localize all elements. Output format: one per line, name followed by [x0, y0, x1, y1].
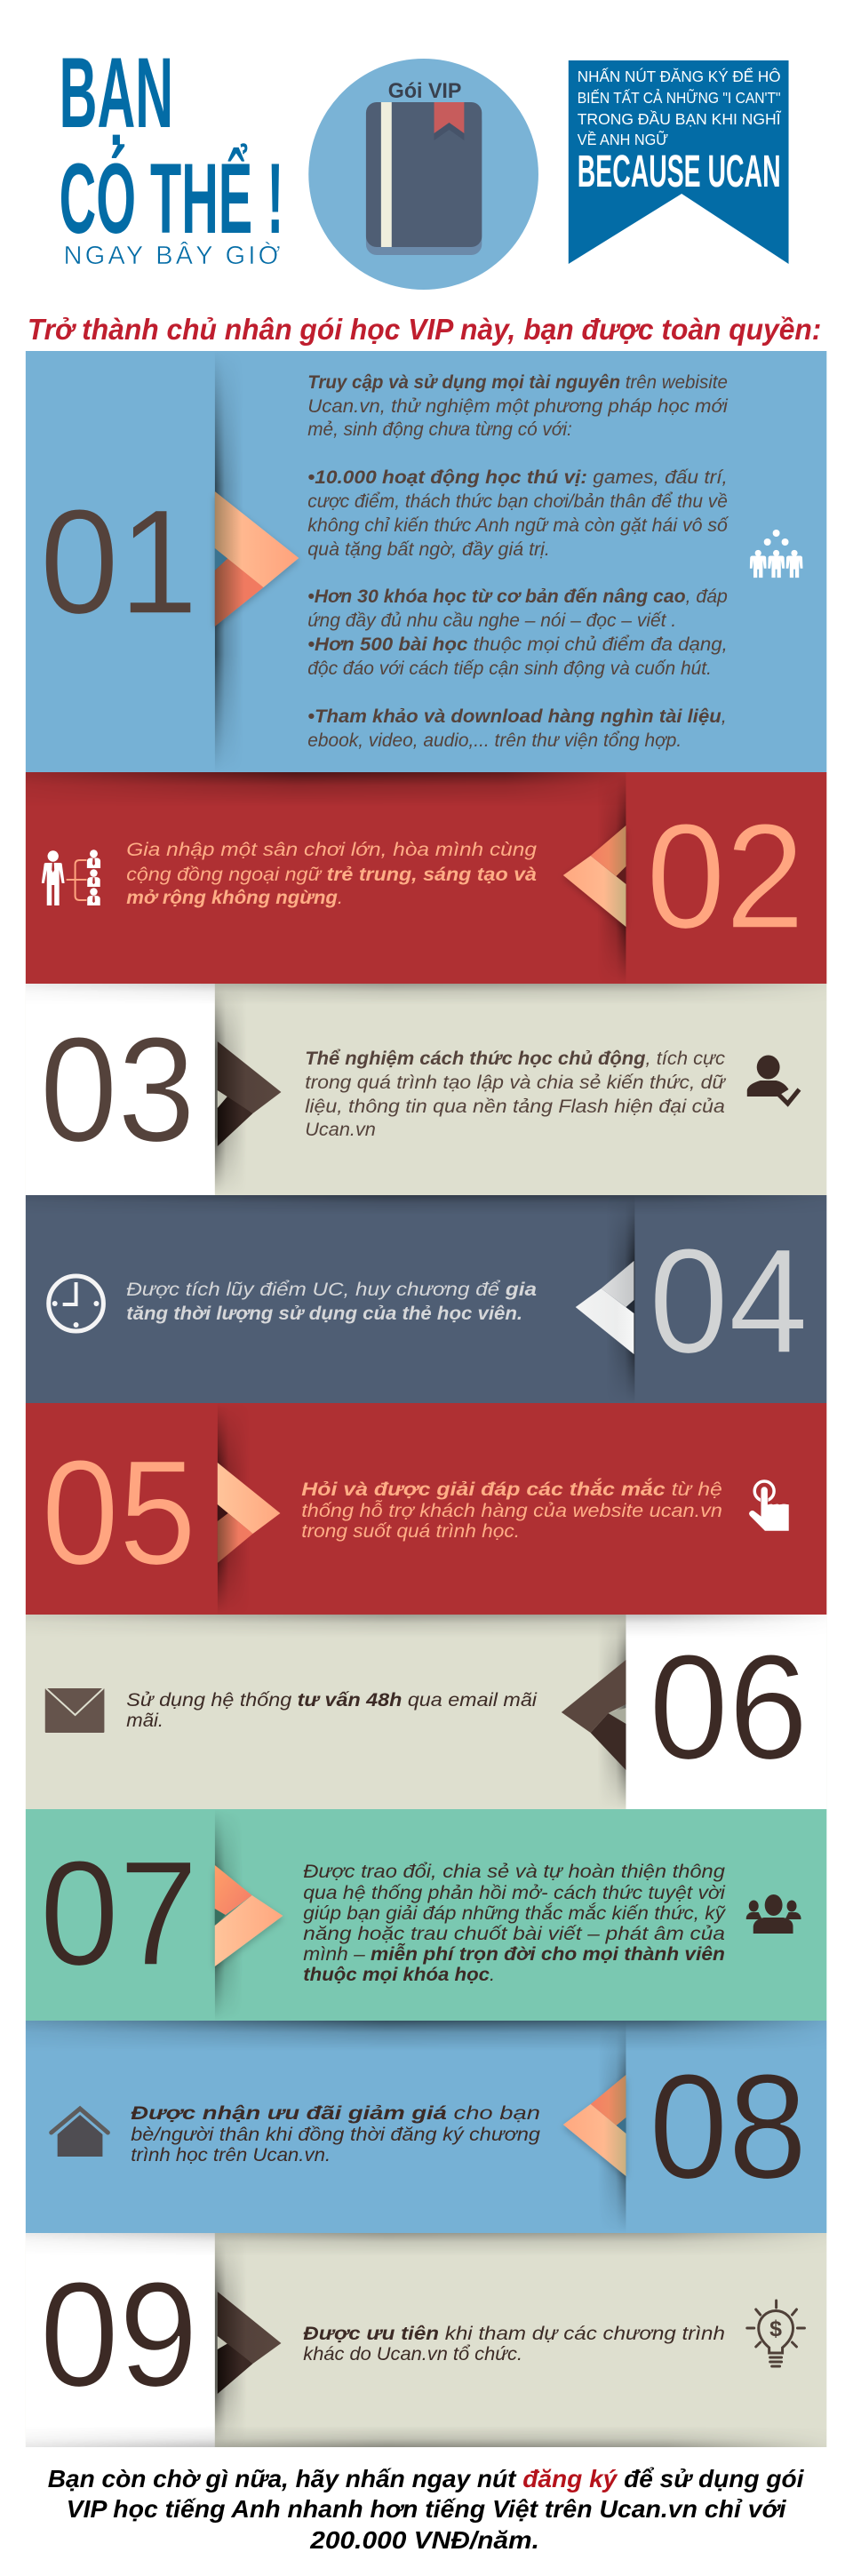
closing call to action: 200.000 VNĐ/năm.: [309, 2526, 539, 2554]
text 03: trong quá trình tạo lập và chia sẻ kiến thức, dữ: [305, 1073, 727, 1093]
text 04: [126, 1280, 537, 1324]
number 01: 01: [40, 478, 198, 645]
icon: pointing hand: [749, 1481, 789, 1531]
text 07: [303, 1862, 727, 1985]
text 03: Thể nghiệm cách thức học chủ động , tích cực: [305, 1049, 725, 1069]
arrow 02: [563, 825, 626, 927]
text 05: trong suốt quá trình học.: [301, 1521, 520, 1542]
text 01: cược điểm, thách thức bạn chơi/bản thân để thu về: [307, 490, 728, 512]
heading line: BẠN: BẠN: [60, 37, 173, 148]
banner text: TRONG ĐẦU BẠN KHI NGHĨ: [578, 109, 782, 128]
arrow 07: [215, 1865, 283, 1966]
number 07: 07: [40, 1830, 198, 1997]
text 01: quà tặng bất ngờ, đầy giá trị.: [307, 538, 550, 560]
text 07: mình – miễn phí trọn đời cho mọi thành viên: [303, 1944, 725, 1965]
panel 07: [26, 1809, 826, 2021]
closing call to action: [48, 2465, 805, 2554]
text 04: Được tích lũy điểm UC, huy chương để gia: [126, 1280, 537, 1300]
subheading: NGAY BÂY GIỜ: NGAY BÂY GIỜ: [64, 241, 281, 270]
text 01: •10.000 hoạt động học thú vị: games, đấu trí,: [307, 467, 728, 488]
banner text: BIẾN TẤT CẢ NHỮNG "I CAN'T": [578, 88, 781, 107]
text 08: trình học trên Ucan.vn.: [131, 2145, 331, 2165]
panel 05: [26, 1403, 826, 1615]
arrow 08: [563, 2075, 626, 2176]
text 01: •Hơn 500 bài học thuộc mọi chủ điểm đa dạng,: [307, 634, 728, 655]
arrow 03: [218, 1041, 281, 1146]
text 02: [126, 840, 537, 908]
text 01: ứng đầy đủ nhu cầu nghe – nói – đọc – viết .: [307, 610, 676, 631]
text 08: Được nhận ưu đãi giảm giá cho bạn: [131, 2103, 540, 2124]
panel 06: [26, 1615, 826, 1809]
text 06: mãi.: [126, 1711, 163, 1731]
text 01: không chỉ kiến thức Anh ngữ mà còn gặt hái vô số: [307, 514, 729, 536]
text 02: cộng đồng ngoại ngữ trẻ trung, sáng tạo và: [126, 865, 537, 885]
icon: VIP book in circle: [308, 59, 538, 290]
text 07: giúp bạn giải đáp những thắc mắc kiến thức, kỹ: [303, 1903, 727, 1924]
text 01: [307, 371, 729, 751]
text 01: Ucan.vn, thử nghiệm một phương pháp học mới: [307, 395, 729, 417]
heading block: Bạn có thể ngay bây giờ: [60, 37, 283, 270]
section title: Trở thành chủ nhân gói học VIP này, bạn được toàn quyền:: [28, 313, 821, 346]
icon: house: [52, 2109, 108, 2157]
icon: clock: [49, 1276, 103, 1331]
text 03: [305, 1049, 727, 1140]
text 01: ebook, video, audio,... trên thư viện tổng hợp.: [307, 730, 682, 751]
text 08: bè/người thân khi đồng thời đăng ký chương: [131, 2125, 540, 2145]
text 01: •Tham khảo và download hàng nghìn tài liệu ,: [307, 706, 727, 727]
text 09: khác do Ucan.vn tổ chức.: [303, 2344, 522, 2365]
icon: money light bulb: $: [769, 2317, 782, 2341]
text 05: [301, 1479, 722, 1542]
arrow 01: [215, 491, 299, 626]
text 01: độc đáo với cách tiếp cận sinh động và cuốn hút.: [307, 658, 712, 679]
text 07: thuộc mọi khóa học .: [303, 1965, 495, 1985]
arrow 04: [576, 1261, 634, 1354]
text 06: Sử dụng hệ thống tư vấn 48h qua email mãi: [126, 1690, 538, 1711]
icon: community pyramid: [750, 530, 802, 578]
number 06: 06: [649, 1623, 808, 1790]
panel 08: [26, 2021, 826, 2233]
text 08: [131, 2103, 540, 2165]
ribbon banner: because ucan: [569, 60, 789, 264]
text 06: [126, 1690, 538, 1731]
icon: money light bulb: [747, 2301, 804, 2366]
text 02: Gia nhập một sân chơi lớn, hòa mình cùng: [126, 840, 537, 860]
panel 04: [26, 1195, 826, 1403]
icon: envelope: [45, 1688, 104, 1733]
panel 02: [26, 772, 826, 984]
number 04: 04: [649, 1217, 808, 1384]
text 03: Ucan.vn: [305, 1120, 376, 1140]
text 01: •Hơn 30 khóa học từ cơ bản đến nâng cao, đáp: [307, 586, 728, 607]
text 05: thống hỗ trợ khách hàng của website ucan.vn: [301, 1501, 722, 1521]
icon: group of people: [746, 1894, 801, 1934]
text 03: liệu, thông tin qua nền tảng Flash hiện đại của: [305, 1097, 725, 1117]
heading line: CÓ THỂ !: CÓ THỂ !: [60, 143, 283, 254]
banner text: [578, 67, 782, 196]
text 09: Được ưu tiên khi tham dự các chương trình: [303, 2324, 725, 2344]
number 02: 02: [646, 793, 804, 960]
icon: person with check: [747, 1056, 799, 1104]
text 09: [303, 2324, 725, 2365]
banner text: VỀ ANH NGỮ: [578, 130, 668, 148]
closing call to action: VIP học tiếng Anh nhanh hơn tiếng Việt trên Ucan.vn chỉ với: [67, 2495, 787, 2523]
panel 03: [26, 984, 826, 1195]
text 02: mở rộng không ngừng .: [126, 888, 343, 908]
arrow 05: [218, 1463, 280, 1563]
text 07: năng hoặc trau chuốt bài viết – phát âm của: [303, 1924, 725, 1944]
number 03: 03: [40, 1006, 195, 1173]
text 05: Hỏi và được giải đáp các thắc mắc từ hệ: [301, 1479, 722, 1500]
arrow 09: [218, 2292, 281, 2394]
text 07: Được trao đổi, chia sẻ và tự hoàn thiện thông: [303, 1862, 725, 1882]
icon: team hierarchy: [42, 849, 100, 905]
number 09: 09: [40, 2251, 198, 2418]
label: Gói VIP: Gói VIP: [388, 79, 461, 103]
arrow 06: [562, 1660, 626, 1770]
number 05: 05: [42, 1429, 196, 1596]
panel 01: [26, 351, 826, 772]
text 01: Truy cập và sử dụng mọi tài nguyên trên webisite: [307, 371, 728, 393]
text 01: mẻ, sinh động chưa từng có với:: [307, 419, 572, 440]
number 08: 08: [649, 2043, 807, 2210]
closing call to action: Bạn còn chờ gì nữa, hãy nhấn ngay nút đăng ký để sử dụng gói: [48, 2465, 805, 2492]
panel 09: [26, 2233, 826, 2447]
banner text: NHẤN NÚT ĐĂNG KÝ ĐỂ HÔ: [578, 67, 781, 85]
text 07: qua hệ thống phản hồi mở- cách thức tuyệt vời: [303, 1883, 726, 1903]
text 04: tăng thời lượng sử dụng của thẻ học viên.: [126, 1304, 522, 1324]
